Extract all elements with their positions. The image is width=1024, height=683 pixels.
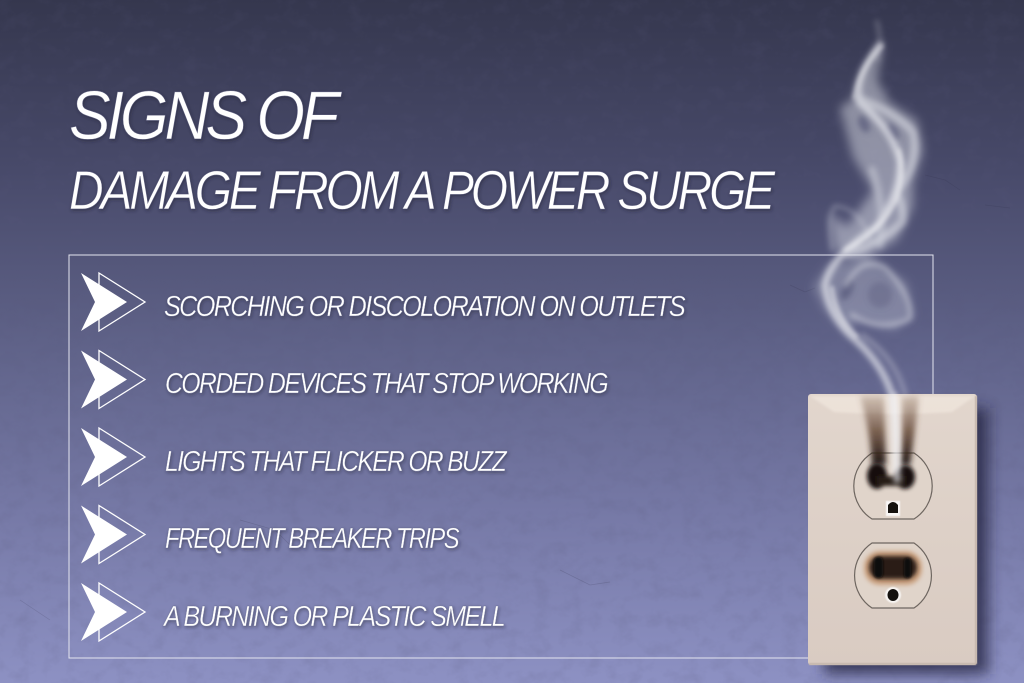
icon: double arrow 4 (81, 506, 145, 564)
title (69, 77, 776, 221)
scorch streaks (860, 396, 919, 465)
icon: double arrow 5 (81, 583, 145, 641)
list item 2: CORDED DEVICES THAT STOP WORKING (165, 368, 608, 400)
title line: damage from a power surge: DAMAGE FROM A POWER SURGE (69, 159, 776, 221)
soft smoke strands (825, 22, 915, 480)
list item 4: FREQUENT BREAKER TRIPS (165, 523, 460, 555)
list item 5: A BURNING OR PLASTIC SMELL (162, 601, 505, 633)
dark gaps in smoke (838, 114, 902, 308)
list frame (69, 255, 933, 658)
icon: double arrow 2 (81, 350, 145, 408)
top receptacle (854, 453, 932, 519)
icon: double arrow 1 (81, 273, 145, 331)
smoke plume (813, 22, 923, 480)
plate shadow (824, 408, 988, 674)
bright smoke cores (832, 46, 901, 470)
icon: double arrow 3 (81, 428, 145, 486)
top receptacle scorch (867, 463, 915, 489)
list item 1: SCORCHING OR DISCOLORATION ON OUTLETS (164, 291, 686, 323)
bottom receptacle (855, 543, 931, 608)
smoke haze bodies (813, 43, 923, 333)
title line: signs of: SIGNS OF (69, 77, 343, 154)
burnt wall outlet (808, 394, 988, 674)
list item 3: LIGHTS THAT FLICKER OR BUZZ (165, 446, 508, 478)
cover plate (808, 394, 977, 665)
list of signs (81, 273, 686, 641)
